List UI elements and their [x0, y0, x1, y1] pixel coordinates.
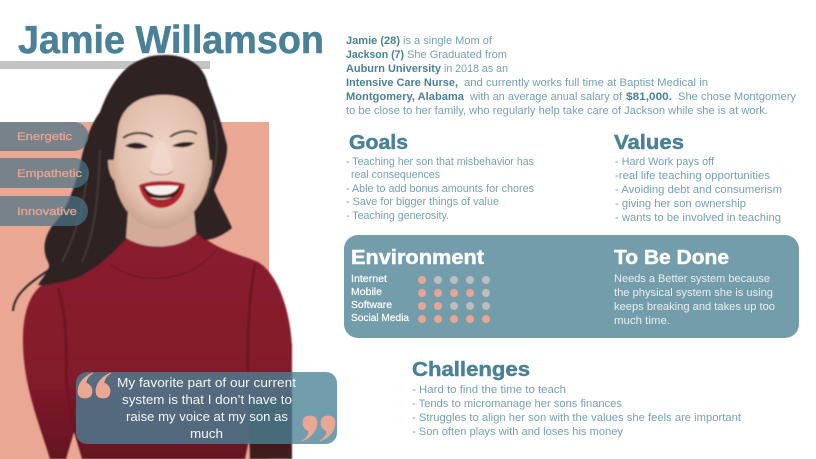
- quote text: raise my voice at my son as: [126, 409, 289, 424]
- pill: Innovative: Innovative: [17, 206, 77, 218]
- bio paragraph: Jamie (28): [346, 35, 400, 47]
- challenges list: - Struggles to align her son with the values she feels are important: [412, 412, 741, 424]
- rating row: Internet: [351, 274, 490, 285]
- portrait: collar line: [110, 250, 216, 278]
- portrait: dark lower arm: [248, 395, 292, 459]
- values list: - Avoiding debt and consumerism: [615, 184, 782, 196]
- trait pills: [0, 122, 89, 226]
- portrait: ears: [108, 160, 212, 182]
- rating row: Mobile: [351, 287, 490, 298]
- goals list: - Able to add bonus amounts for chores: [346, 183, 534, 195]
- portrait: upper teeth: [145, 185, 179, 195]
- bio paragraph: Montgomery, Alabama: [346, 91, 465, 103]
- to be done text: [614, 273, 775, 327]
- portrait: mouth interior: [143, 185, 181, 201]
- portrait: nose shading: [150, 142, 173, 176]
- portrait: right arm seam: [248, 264, 255, 400]
- rating row: Internet: Internet: [351, 274, 387, 285]
- values list: - Hard Work pays off: [615, 156, 715, 168]
- rating row: Social Media: [351, 313, 490, 324]
- goals list: real consequences: [351, 169, 440, 181]
- quote text: much: [190, 426, 223, 441]
- quote text: [117, 375, 296, 441]
- goals list: - Teaching generosity.: [346, 210, 449, 222]
- goals list: - Save for bigger things of value: [346, 196, 499, 208]
- rating row: Mobile: Mobile: [351, 287, 382, 298]
- pill: Empathetic: Empathetic: [17, 168, 83, 180]
- portrait: face: [113, 95, 210, 229]
- portrait: eyebrows: [123, 131, 197, 138]
- portrait of Jamie: [13, 55, 292, 459]
- challenges list: - Hard to find the time to teach: [412, 384, 566, 396]
- bio paragraph: She Graduated from: [407, 49, 507, 61]
- to be done text: the physical system she is using: [614, 287, 773, 299]
- values list: - wants to be involved in teaching: [615, 212, 781, 224]
- bio paragraph: She chose Montgomery: [678, 91, 797, 103]
- to be done text: keeps breaking and takes up too: [614, 301, 775, 313]
- icon: closing quote mark: [302, 416, 335, 441]
- rating row: Software: Software: [351, 300, 392, 311]
- challenges list: - Son often plays with and loses his money: [412, 426, 623, 438]
- quote callout: [76, 372, 337, 444]
- heading: Goals: Goals: [349, 132, 408, 154]
- values list: -real life teaching opportunities: [615, 170, 771, 182]
- portrait: hair: [38, 55, 232, 285]
- portrait: eyes: [125, 142, 195, 149]
- portrait: hair highlight: [62, 120, 217, 262]
- bio paragraph: [346, 35, 797, 117]
- goals list: - Teaching her son that misbehavior has: [346, 156, 534, 168]
- values section: [614, 132, 782, 224]
- bio paragraph: $81,000.: [626, 91, 672, 103]
- quote text: system is that I don’t have to: [122, 392, 292, 407]
- bio paragraph: Intensive Care Nurse,: [346, 77, 458, 89]
- portrait: neck: [126, 212, 196, 247]
- portrait: nostril shadow: [150, 171, 173, 175]
- bio paragraph: Auburn University: [346, 63, 442, 75]
- bio paragraph: in 2018 as an: [444, 63, 508, 75]
- rating row: Social Media: Social Media: [351, 313, 409, 324]
- rating row: Software: [351, 300, 490, 311]
- challenges list: - Tends to micromanage her sons finances: [412, 398, 623, 410]
- heading: Values: Values: [614, 132, 684, 154]
- portrait: lips: [139, 181, 185, 208]
- salmon backdrop panel: [0, 122, 269, 459]
- bio paragraph: with an average anual salary of: [469, 91, 623, 103]
- grey title underline bar: [0, 61, 210, 69]
- portrait: sweater: [23, 232, 292, 459]
- values list: [615, 156, 782, 224]
- portrait: hair strand: [13, 262, 56, 311]
- challenges list: [412, 384, 741, 438]
- title: Jamie Willamson: [18, 19, 324, 62]
- portrait: lower teeth: [150, 197, 172, 200]
- challenges section: [412, 359, 741, 438]
- portrait: left arm seam: [58, 288, 74, 432]
- heading: Environment: Environment: [351, 247, 484, 269]
- bio paragraph: Jackson (7): [346, 49, 404, 61]
- values list: - giving her son ownership: [615, 198, 746, 210]
- bio paragraph: is a single Mom of: [403, 35, 493, 47]
- goals list: [346, 156, 534, 222]
- heading: To Be Done: To Be Done: [614, 247, 729, 269]
- to be done text: much time.: [614, 315, 670, 327]
- goals section: [346, 132, 534, 222]
- to be done text: Needs a Better system because: [614, 273, 770, 285]
- pill: Energetic: Energetic: [17, 131, 73, 143]
- bio paragraph: to be close to her family, who regularly help take care of Jackson while she is at work.: [346, 105, 768, 117]
- bio paragraph: and currently works full time at Baptist Medical in: [464, 77, 708, 89]
- icon: opening quote mark: [78, 373, 111, 398]
- heading: Challenges: Challenges: [412, 359, 530, 381]
- quote text: My favorite part of our current: [117, 375, 296, 390]
- panel: environment and to be done: [344, 235, 799, 338]
